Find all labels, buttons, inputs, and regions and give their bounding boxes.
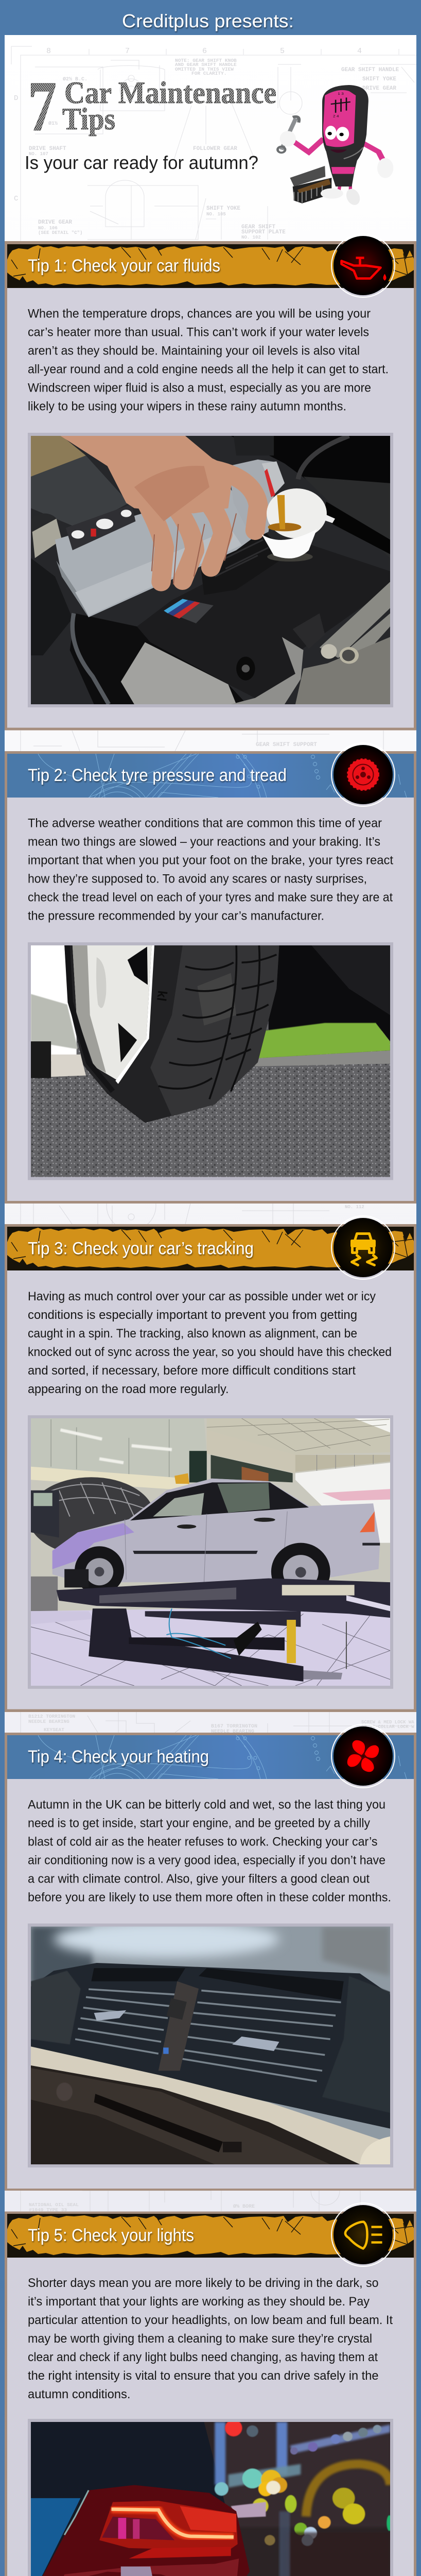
body text: how they’re supposed to. To avoid any scares or nasty surprises,: [28, 872, 367, 886]
panel: tip 2 tyres: [5, 743, 416, 1204]
blueprint drawing: gaps between tips: B1212 TORRINGTON: [28, 1714, 76, 1719]
title: [28, 67, 276, 146]
body text: a car with climate control. Also, give your filters a good clean out: [28, 1872, 370, 1886]
blueprint drawing: top section: NO. 102: [241, 235, 261, 240]
body text: [28, 1798, 391, 1904]
body text: clear and check if any light bulbs need changing, as having them at: [28, 2350, 378, 2364]
icon: fan: [331, 1724, 395, 1788]
blueprint drawing: gaps between tips: [21, 731, 414, 2576]
blueprint drawing: top section: Ø1½: [48, 121, 58, 127]
blueprint drawing: top section: AND GEAR SHIFT HANDLE: [175, 62, 237, 67]
blueprint drawing: top section: 4: [357, 47, 362, 56]
blueprint drawing: top section: DRIVE GEAR: [38, 219, 72, 226]
blueprint drawing: top section: DRIVE SHAFT: [29, 146, 66, 152]
panel: tip 4 heating: [5, 1724, 416, 2191]
body text: [28, 1290, 392, 1396]
body text: need is to get inside, start your engine, and be greeted by a chilly: [28, 1817, 370, 1830]
body text: [28, 307, 389, 413]
body text: [28, 2276, 393, 2401]
body text: before you are likely to use them more often in these colder months.: [28, 1891, 391, 1904]
title: Car Maintenance: [64, 76, 276, 110]
blueprint drawing: top section: NO. 105: [206, 212, 226, 217]
subtitle: Is your car ready for autumn?: [25, 152, 258, 173]
blueprint drawing: gaps between tips: B167 TORRINGTON: [211, 1724, 257, 1730]
blueprint drawing: gaps between tips: SCREW & MED LOCK WA: [361, 1720, 414, 1725]
blueprint drawing: gaps between tips: NATIONAL OIL SEAL: [29, 2202, 79, 2208]
panel: tip 3 tracking: [5, 1216, 416, 1712]
blueprint drawing: top section: SUPPORT PLATE: [241, 229, 286, 235]
blueprint drawing: gaps between tips: OR HI-COLLAR LOCK W: [361, 1724, 414, 1730]
mascot: gear knob with wrench and toolbox: 1 3: [338, 92, 344, 96]
photo: pouring oil into engine: [28, 433, 393, 707]
body text: important that when you put your foot on the brake, your tyres react: [28, 853, 393, 867]
body text: particular attention to your headlights, on low beam and full beam. It: [28, 2313, 393, 2327]
body text: Autumn in the UK can be bitterly cold and wet, so the last thing you: [28, 1798, 385, 1811]
blueprint drawing: top section: D: [14, 94, 18, 103]
blueprint drawing: top section: C: [14, 195, 18, 203]
heading: Tip 2: Check tyre pressure and tread: [28, 766, 287, 785]
blueprint drawing: top section: GEAR SHIFT HANDLE: [341, 67, 399, 73]
body text: knocked out of sync across the year, so you should have this checked: [28, 1345, 392, 1359]
body text: check the tread level on each of your tyres and make sure they are at: [28, 890, 393, 904]
body text: Windscreen wiper fluid is also a must, especially as you are more: [28, 381, 371, 395]
body text: blast of cold air as the heater refuses to work. Checking your car’s: [28, 1835, 378, 1849]
photo: car tyre on road: [28, 942, 393, 1180]
panel frame: [5, 1733, 416, 2191]
title: 7: [28, 67, 57, 146]
blueprint drawing: top section: SHIFT YOKE: [206, 206, 240, 212]
blueprint drawing: top section: SHIFT YOKE: [362, 76, 396, 82]
blueprint drawing: gaps between tips: GEAR SHIFT SUPPORT: [256, 742, 317, 748]
body text: conditions is especially important to prevent you from getting: [28, 1308, 357, 1322]
icon: headlight: [331, 2203, 395, 2266]
blueprint drawing: top section: 5: [280, 47, 285, 56]
blueprint drawing: top section: (SEE DETAIL "C"): [38, 230, 82, 235]
heading: Tip 3: Check your car’s tracking: [28, 1239, 254, 1258]
title: Tips: [62, 102, 115, 136]
panel frame: [5, 2211, 416, 2576]
blueprint drawing: top section: FOLLOWER GEAR: [193, 146, 237, 152]
body text: likely to be using your wipers in these rainy autumn months.: [28, 400, 346, 413]
body text: air conditioning now is a very good idea, especially if you don’t have: [28, 1854, 385, 1867]
body text: autumn conditions.: [28, 2387, 131, 2401]
blueprint drawing: gaps between tips: #1049 TYPE 33: [29, 2207, 67, 2213]
blueprint drawing: top section: DRIVE GEAR: [362, 86, 396, 92]
body text: aren’t as they should be. Maintaining your oil levels is also vital: [28, 344, 360, 358]
banner: [7, 1227, 414, 1270]
heading: Tip 1: Check your car fluids: [28, 256, 220, 276]
body text: the pressure recommended by your car’s manufacturer.: [28, 909, 324, 923]
blueprint drawing: top section: FOR CLARITY.: [191, 71, 226, 76]
body text: and sorted, if necessary, before more difficult conditions start: [28, 1364, 356, 1378]
body text: The adverse weather conditions that are common this time of year: [28, 816, 382, 830]
banner: [7, 2214, 414, 2258]
blueprint drawing: top section: GEAR SHIFT: [241, 224, 275, 230]
blueprint drawing: top section: OMITTED IN THIS VIEW: [175, 66, 234, 72]
blueprint drawing: top section: Ø2½ B.C.: [63, 76, 87, 82]
panel: tip 1 car fluids: [5, 234, 416, 731]
heading: Tip 5: Check your lights: [28, 2226, 194, 2245]
banner: [7, 244, 414, 288]
panel frame: [5, 241, 416, 731]
banner: [7, 1735, 414, 1832]
photo: car tail light at night: [28, 2419, 393, 2576]
heading: Tip 4: Check your heating: [28, 1747, 209, 1767]
blueprint drawing: gaps between tips: NEEDLE BEARING: [211, 1729, 254, 1735]
icon: oil can: [331, 234, 395, 297]
panel: tip 5 lights: [5, 2203, 416, 2576]
photo: car tyre on road: kl: [154, 990, 169, 1002]
body text: mean two things are slowed – your reactions and your braking. It’s: [28, 835, 380, 849]
photo: dashboard air vent: [28, 1921, 393, 2167]
mascot: gear knob with wrench and toolbox: 2 4: [333, 114, 339, 118]
body text: may be worth giving them a cleaning to make sure they’re crystal: [28, 2332, 372, 2346]
body text: When the temperature drops, chances are you will be using your: [28, 307, 371, 320]
blueprint drawing: top section: 7: [125, 47, 130, 56]
icon: skidding car: [331, 1216, 395, 1279]
presenter heading: Creditplus presents:: [122, 10, 294, 31]
blueprint drawing: top section: 8: [46, 47, 51, 56]
panel frame: [5, 751, 416, 1204]
body text: [28, 816, 393, 923]
body text: car’s heater more than usual. This can’t work if your water levels: [28, 326, 369, 339]
panel frame: [5, 1224, 416, 1712]
banner: [7, 754, 414, 851]
blueprint drawing: gaps between tips: KEYSEAT: [44, 1727, 64, 1733]
body text: all-year round and a cold engine needs all the help it can get to start.: [28, 363, 389, 376]
blueprint drawing: top section: NOTE: GEAR SHIFT KNOB: [175, 58, 237, 63]
body text: Shorter days mean you are more likely to be driving in the dark, so: [28, 2276, 379, 2290]
body text: appearing on the road more regularly.: [28, 1382, 229, 1396]
blueprint drawing: gaps between tips: NEEDLE BEARING: [28, 1719, 69, 1724]
mascot: gear knob with wrench and toolbox: [277, 85, 393, 206]
blueprint drawing: gaps between tips: NO. 112: [345, 1205, 364, 1210]
blueprint drawing: top section: NO. 106: [38, 226, 58, 231]
body text: caught in a spin. The tracking, also known as alignment, can be: [28, 1327, 357, 1341]
body text: Having as much control over your car as possible under wet or icy: [28, 1290, 376, 1303]
icon: tyre: [331, 743, 395, 806]
blueprint drawing: top section: [11, 46, 416, 241]
blueprint drawing: top section: NO. 107: [29, 151, 48, 157]
blueprint drawing: gaps between tips: Ø⅝ BORE: [233, 2204, 255, 2210]
body text: the right intensity is vital to ensure that you can drive safely in the: [28, 2369, 379, 2383]
body text: it’s important that your lights are working as they should be. Pay: [28, 2295, 370, 2309]
photo: car on alignment lift: [28, 1415, 393, 1689]
blueprint drawing: top section: 6: [202, 47, 207, 56]
